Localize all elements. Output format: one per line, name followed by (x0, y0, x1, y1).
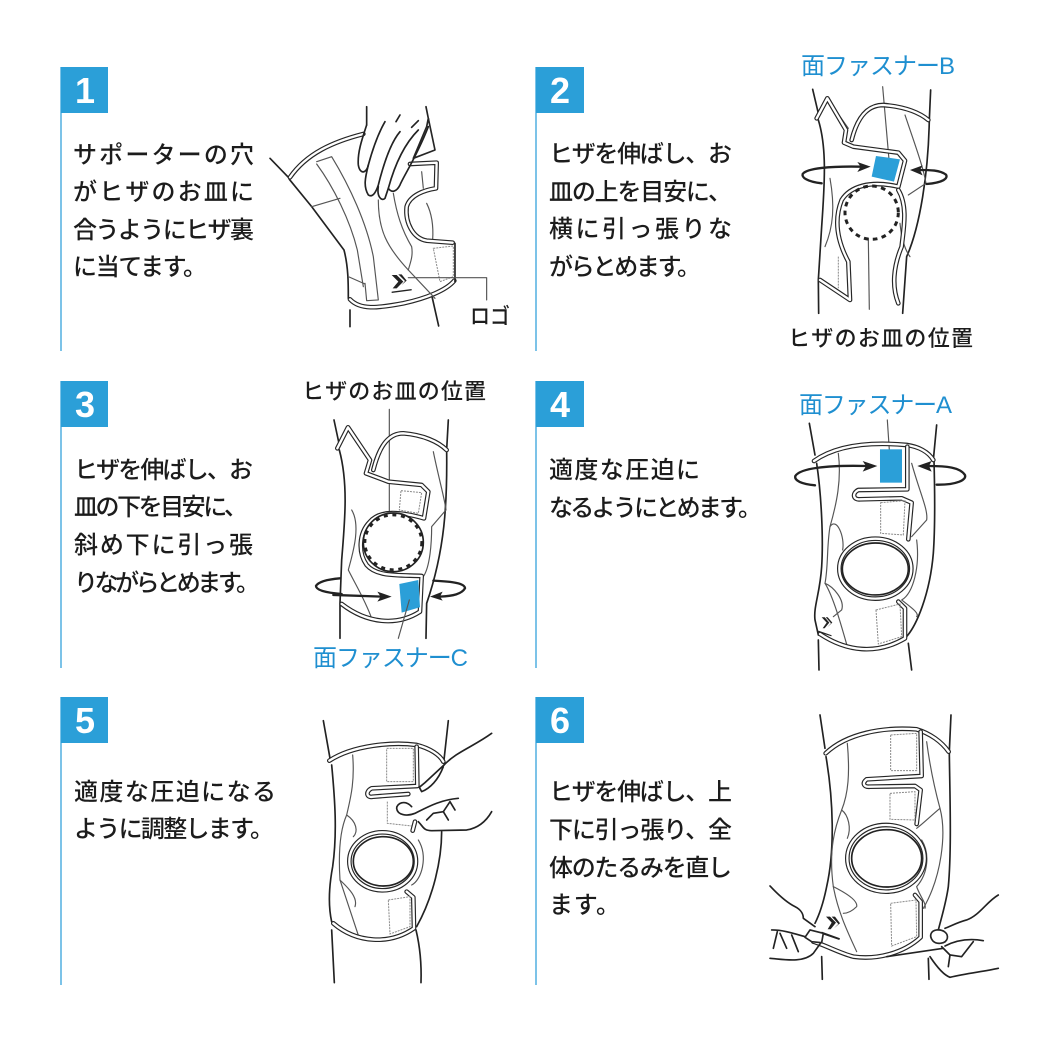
logo leader line (408, 278, 487, 300)
illustration: side view of knee with hand and logo (270, 107, 487, 327)
step 3 instructions: 皿の下を目安に、 (74, 494, 248, 521)
step 2 number badge (536, 67, 584, 113)
label: logo: ロゴ (470, 304, 510, 329)
step 5 instructions: 適度な圧迫になる (74, 779, 276, 806)
step 4 instructions: なるようにとめます。 (549, 495, 762, 522)
panel: step 1 (60, 67, 510, 351)
hand (358, 115, 435, 199)
step 3 rule (60, 381, 62, 668)
step 2 rule (535, 67, 537, 351)
right wrap arrow (910, 165, 947, 184)
step 5 instructions (74, 779, 276, 843)
illustration: knee with fastener B wrapped across (803, 87, 947, 313)
step 3 instructions (74, 457, 260, 597)
label: kneecap position: ヒザのお皿の位置 (788, 326, 973, 351)
left wrap arrow (803, 162, 871, 183)
step 6 number badge (536, 697, 584, 743)
panel: step 6 (535, 697, 998, 985)
step 3 number badge (61, 381, 108, 427)
right wrap arrow (430, 581, 465, 601)
illustration: hands pulling the hem down (770, 715, 998, 979)
step 4 rule (535, 381, 537, 668)
kneecap position dashed circle (845, 186, 898, 239)
illustration: knee with fastener C below kneecap (316, 409, 465, 638)
step 1 instructions: 合うようにヒザ裏 (73, 217, 254, 244)
step 6 instructions: 体のたるみを直し (549, 855, 732, 882)
step 1 rule (60, 67, 62, 351)
step 4 number badge (536, 381, 584, 427)
step 2 instructions: ヒザを伸ばし、お (549, 141, 732, 168)
step 1 number badge (61, 67, 108, 113)
step 1 instructions (73, 142, 254, 281)
step 5 number badge: 5 (75, 700, 95, 741)
step 5 rule (60, 697, 62, 985)
kneecap opening (852, 830, 922, 887)
kneecap opening (353, 837, 413, 886)
label: hook and loop fastener B: 面ファスナーB (801, 53, 955, 80)
left wrap arrow (316, 578, 392, 602)
panel: step 2 (535, 53, 973, 351)
step 1 instructions: がヒザのお皿に (73, 179, 254, 206)
blue fastener patch B (872, 156, 900, 182)
left hand (770, 886, 823, 960)
step 6 number badge: 6 (550, 700, 570, 741)
step 2 number badge: 2 (550, 70, 570, 111)
kneecap dashed outline (365, 515, 422, 570)
step 6 rule (535, 697, 537, 985)
step 3 number badge: 3 (75, 384, 95, 425)
step 3 instructions: りながらとめます。 (74, 570, 260, 597)
step 6 instructions: 下に引っ張り、全 (549, 817, 732, 844)
illustration: hand adjusting the strap (323, 721, 492, 983)
step 4 number badge: 4 (550, 384, 570, 425)
step 6 instructions: ヒザを伸ばし、上 (549, 779, 732, 806)
step 4 instructions (549, 457, 762, 522)
step 2 instructions: 横に引っ張りな (549, 216, 732, 243)
step 5 number badge (61, 697, 108, 743)
step 1 number badge: 1 (75, 70, 95, 111)
step 1 instructions: に当てます。 (73, 254, 207, 281)
logo mark (818, 617, 832, 636)
panel: step 4 (535, 381, 965, 670)
blue fastener patch C (399, 580, 420, 613)
step 3 instructions: ヒザを伸ばし、お (74, 457, 253, 484)
kneecap opening (842, 543, 908, 595)
step 1 instructions: サポーターの穴 (73, 142, 254, 169)
left wrap arrow (795, 461, 877, 485)
label: kneecap position: ヒザのお皿の位置 (302, 379, 486, 404)
step 6 instructions: ます。 (549, 892, 620, 919)
step 3 instructions: 斜め下に引っ張 (74, 532, 253, 559)
step 6 instructions (549, 779, 732, 919)
right wrap arrow (917, 461, 965, 485)
kneecap opening (363, 513, 423, 572)
hand (396, 733, 492, 831)
illustration: knee with fastener A at top (795, 420, 965, 670)
logo mark (822, 917, 840, 940)
step 2 instructions: がらとめます。 (549, 254, 701, 281)
right hand (930, 895, 998, 977)
label: hook and loop fastener A: 面ファスナーA (799, 392, 952, 419)
step 2 instructions (549, 141, 732, 281)
panel: step 3 (60, 379, 486, 672)
step 5 instructions: ように調整します。 (74, 816, 274, 843)
step 2 instructions: 皿の上を目安に、 (549, 179, 732, 206)
step 4 instructions: 適度な圧迫に (549, 457, 700, 484)
logo mark (392, 274, 412, 293)
label: hook and loop fastener C: 面ファスナーC (313, 645, 468, 672)
panel: step 5 (60, 697, 492, 985)
blue fastener patch A (880, 449, 902, 483)
